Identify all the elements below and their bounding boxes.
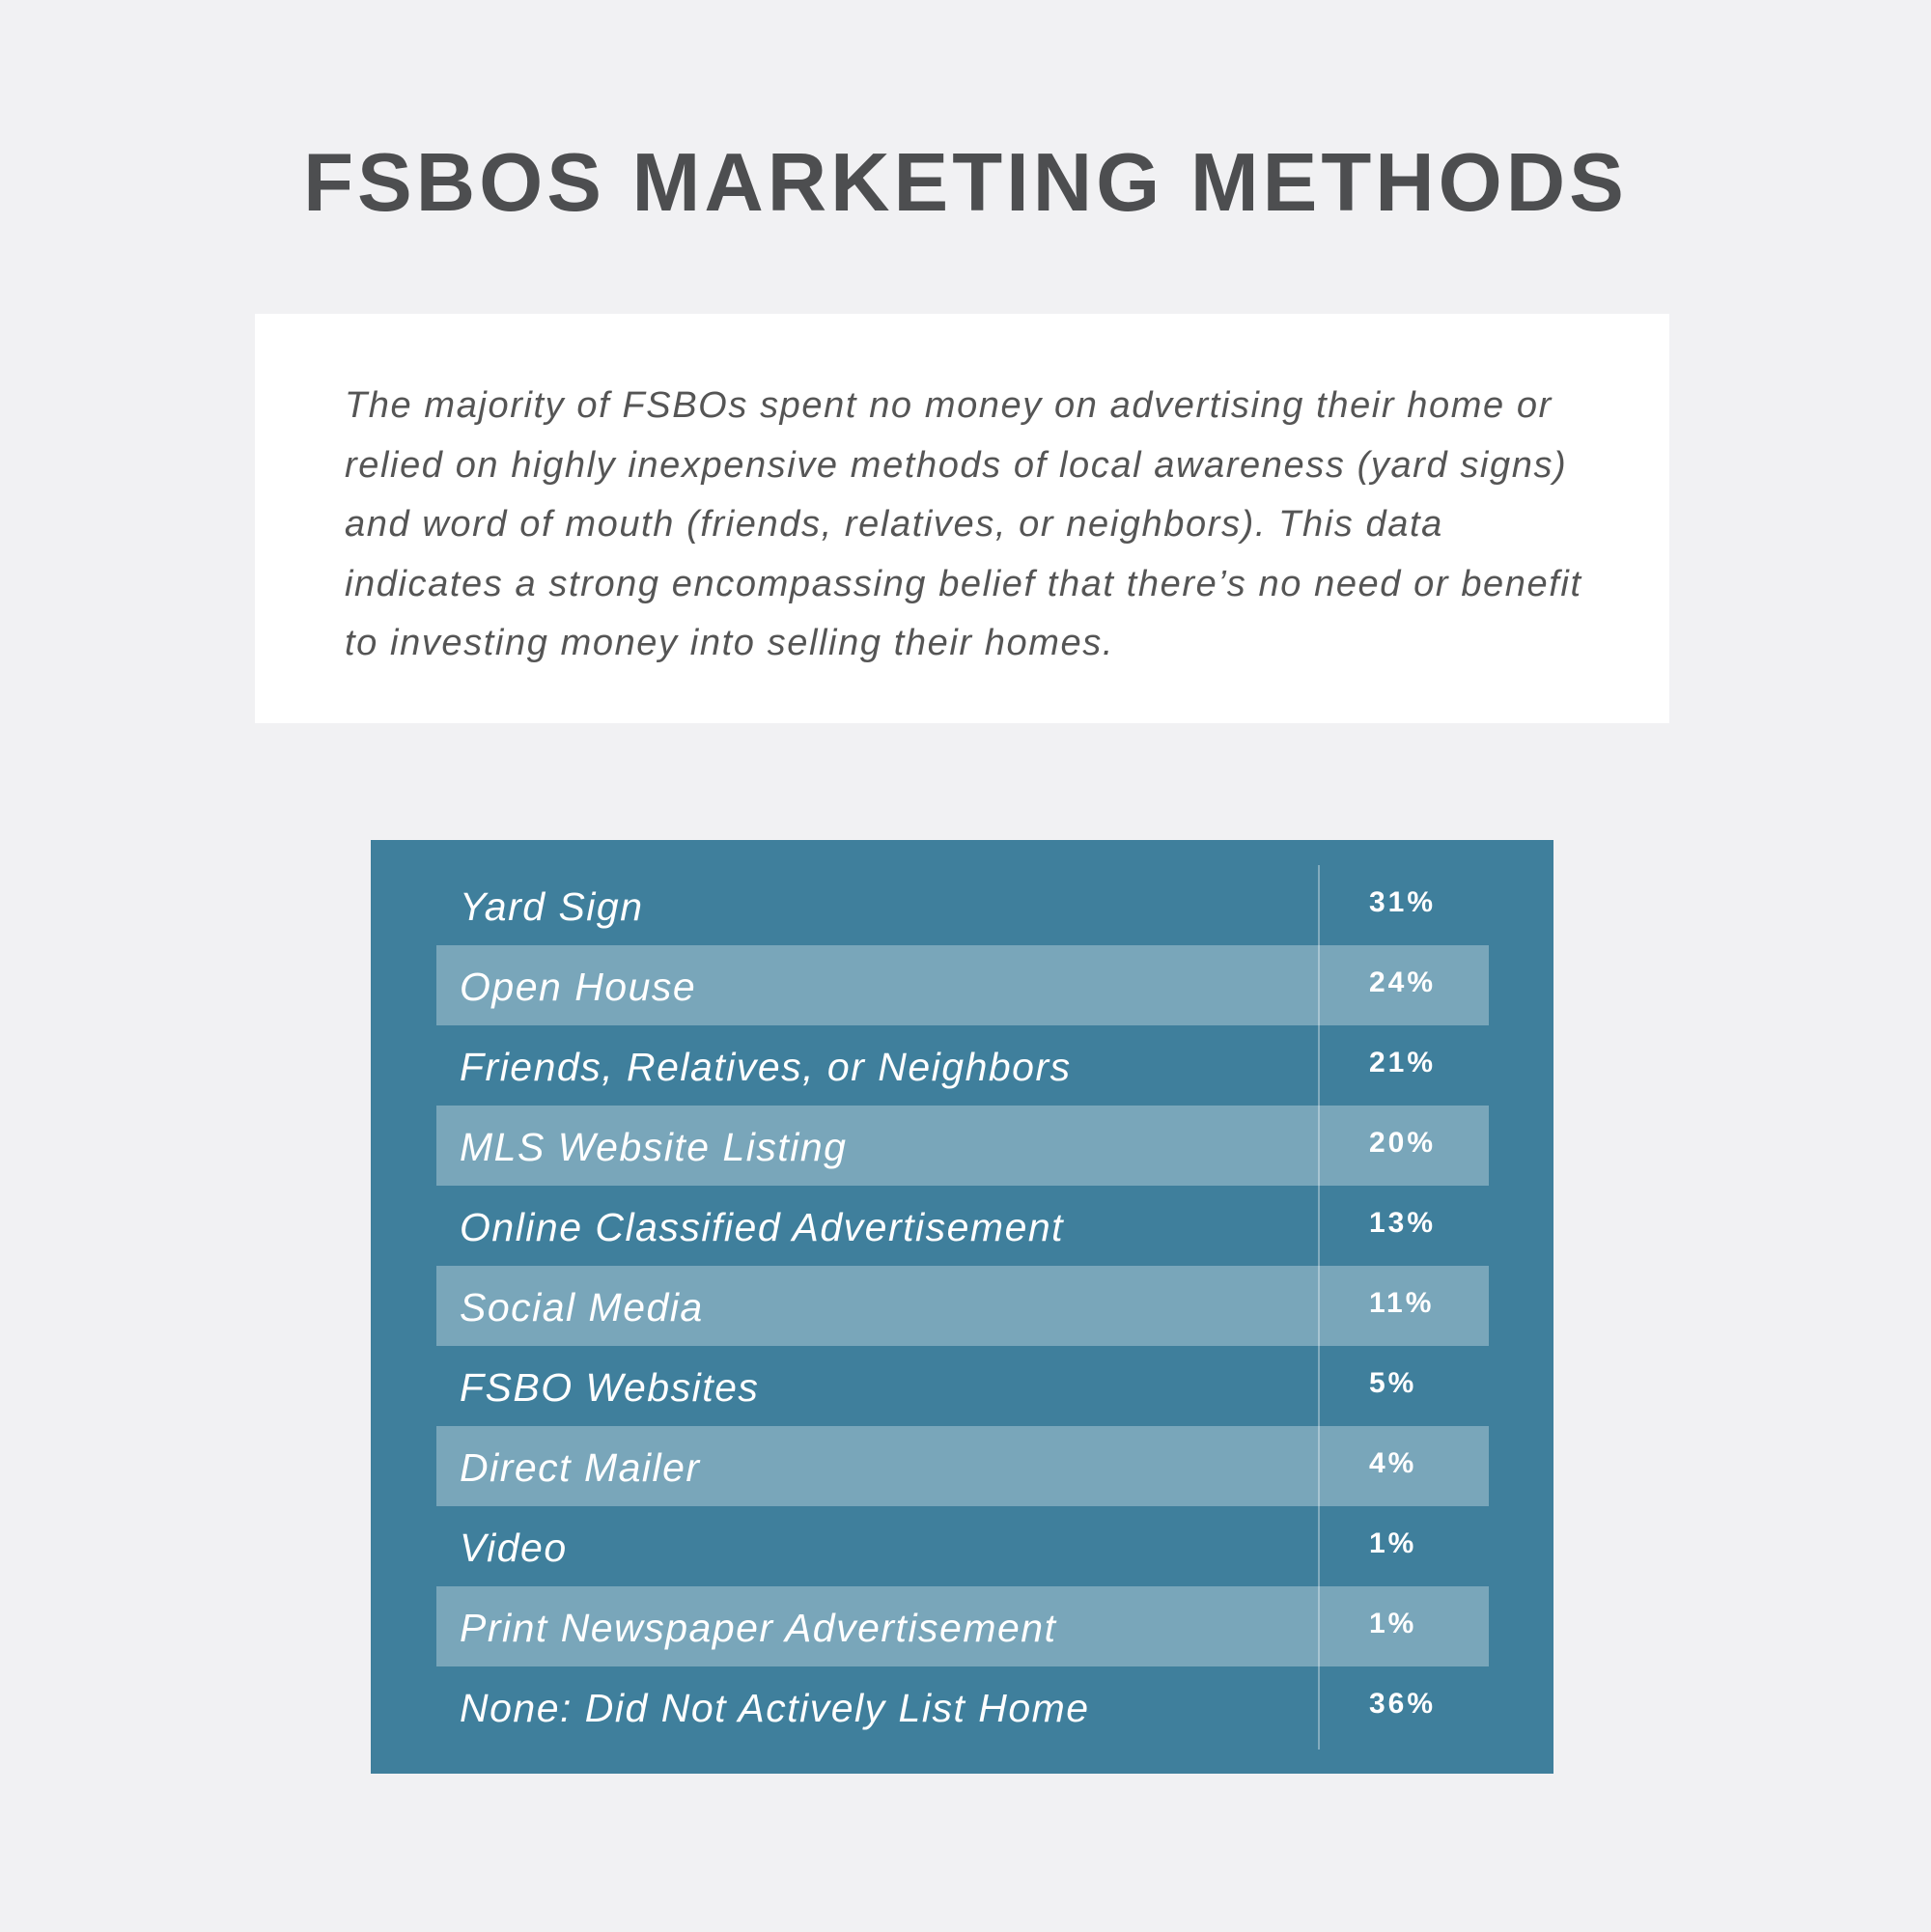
panel: marketing methods table: MLS Website Listing: [460, 1125, 847, 1169]
panel: marketing methods table: [371, 840, 1553, 1774]
panel: marketing methods table: Direct Mailer: [460, 1445, 701, 1490]
panel: marketing methods table: FSBO Websites: [460, 1365, 759, 1410]
panel: marketing methods table: 11%: [1369, 1287, 1434, 1319]
panel: marketing methods table: 31%: [1369, 886, 1436, 918]
panel: marketing methods table: 20%: [1369, 1127, 1436, 1159]
panel: marketing methods table: Online Classified Advertisement: [460, 1205, 1064, 1249]
panel: marketing methods table: 21%: [1369, 1047, 1436, 1078]
panel: marketing methods table: Yard Sign: [460, 884, 644, 929]
panel: marketing methods table: Video: [460, 1526, 568, 1570]
panel: marketing methods table: Friends, Relatives, or Neighbors: [460, 1045, 1072, 1089]
panel: marketing methods table: 13%: [1369, 1207, 1436, 1239]
panel: marketing methods table: 36%: [1369, 1688, 1436, 1720]
panel: marketing methods table: 4%: [1369, 1447, 1416, 1479]
panel: marketing methods table: 1%: [1369, 1608, 1416, 1639]
panel: intro text box: [255, 314, 1669, 723]
intro paragraph: The majority of FSBOs spent no money on advertising their home or relied on highly inexpensive methods of local awareness (yard signs) and word of mouth (friends, relatives, or neighbors). This data indicates a strong encompassing belief that there’s no need or benefit to investing money into selling their homes.: [345, 385, 1582, 663]
panel: marketing methods table: Social Media: [460, 1285, 704, 1330]
panel: marketing methods table: Print Newspaper Advertisement: [460, 1606, 1057, 1650]
title: FSBOS MARKETING METHODS: [303, 137, 1628, 229]
panel: marketing methods table: 1%: [1369, 1527, 1416, 1559]
panel: marketing methods table: None: Did Not Actively List Home: [460, 1686, 1090, 1730]
panel: marketing methods table: 24%: [1369, 966, 1436, 998]
panel: marketing methods table: Open House: [460, 965, 696, 1009]
panel: marketing methods table: 5%: [1369, 1367, 1416, 1399]
